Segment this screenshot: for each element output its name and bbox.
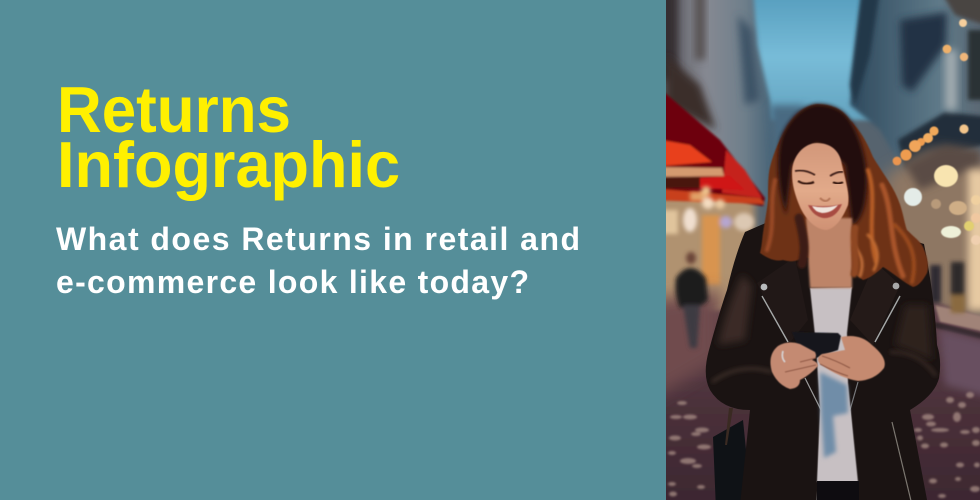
jacket lapels [757, 257, 808, 345]
closed eyes [798, 181, 814, 184]
dark crown of the hair [778, 104, 867, 226]
subtitle [56, 221, 580, 300]
eyebrows [795, 170, 815, 175]
red awning [666, 92, 766, 208]
hands holding phone [770, 336, 885, 389]
lapel studs [761, 284, 767, 290]
neck [806, 218, 852, 288]
title: Infographic [57, 128, 400, 201]
hair locks over the neck [799, 218, 855, 274]
teal background panel [0, 0, 666, 500]
white top [810, 287, 859, 500]
title: Returns [57, 73, 291, 146]
nose [820, 198, 830, 201]
photo backdrop: sky and buildings [666, 0, 980, 316]
title [57, 73, 400, 201]
copper strands [767, 170, 914, 282]
subtitle: e-commerce look like today? [56, 264, 529, 300]
subtitle: What does Returns in retail and [56, 221, 580, 257]
mouth and teeth [808, 204, 842, 218]
hair back layer [760, 104, 928, 287]
photo: woman smiling at her phone on a city street at dusk [666, 0, 980, 500]
warm glow of right-hand shops [880, 150, 980, 320]
lapel zip trim [762, 296, 788, 342]
leather sheen [718, 275, 752, 345]
handbag [713, 408, 746, 500]
pedestrian in background [676, 252, 708, 348]
string lights and street lamps [893, 19, 980, 245]
phone [792, 332, 841, 361]
background pedestrians right [930, 262, 965, 313]
street reflections [668, 392, 980, 498]
jacket [706, 222, 940, 500]
bokeh lights, shop windows [660, 186, 754, 285]
street pavement [640, 290, 980, 500]
face [792, 143, 849, 230]
